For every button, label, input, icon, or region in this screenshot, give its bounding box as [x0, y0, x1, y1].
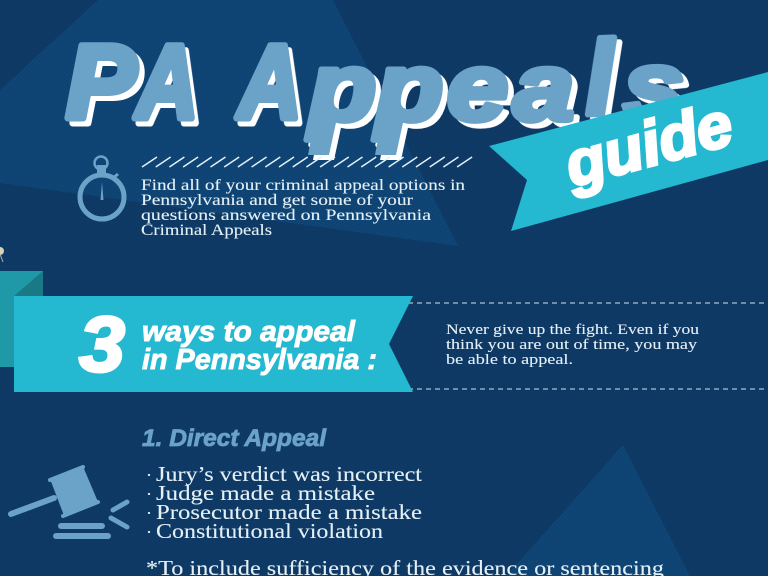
icon: stopwatch: [80, 156, 124, 219]
icon: gavel: [11, 467, 127, 536]
big numeral 3: 3: [79, 300, 125, 388]
side note: be able to appeal.: [446, 352, 573, 368]
intro text: questions answered on Pennsylvania: [141, 207, 431, 224]
banner: 3 ways to appeal: in Pennsylvania :: [142, 344, 377, 376]
title: A: [134, 24, 198, 141]
ribbon: guide: guide: [557, 89, 740, 201]
heading: direct appeal: 1. Direct Appeal: [142, 425, 327, 452]
list: direct appeal reasons: ·: [146, 484, 152, 504]
side note: Never give up the fight. Even if you: [446, 322, 700, 338]
dashed lines: [408, 303, 768, 389]
small figure at edge: [0, 247, 4, 262]
list: direct appeal reasons: Jury’s verdict was incorrect: [156, 462, 422, 486]
list: direct appeal reasons: Judge made a mistake: [156, 481, 375, 505]
list: direct appeal reasons: [146, 462, 664, 576]
title: p: [373, 34, 443, 140]
ribbon: guide: [489, 72, 768, 231]
title: P: [66, 24, 137, 141]
side note: [446, 322, 700, 368]
list: direct appeal reasons: ·: [146, 465, 152, 485]
title: [66, 19, 684, 155]
title: s: [623, 32, 684, 138]
side note: think you are out of time, you may: [446, 337, 698, 353]
intro text: Criminal Appeals: [141, 222, 272, 239]
title: l: [583, 19, 618, 137]
decorative hatch rule: [142, 157, 472, 167]
banner: 3 ways to appeal: ways to appeal: [142, 316, 356, 348]
list: direct appeal reasons: Prosecutor made a mistake: [156, 500, 422, 524]
title: e: [447, 34, 508, 140]
list: direct appeal reasons: Constitutional violation: [156, 519, 383, 543]
title: a: [513, 34, 574, 140]
list: direct appeal reasons: ·: [146, 503, 152, 523]
intro text: [141, 177, 465, 239]
title: p: [306, 34, 376, 140]
banner: 3 ways to appeal: [14, 296, 413, 392]
title: A: [236, 23, 302, 141]
intro text: Pennsylvania and get some of your: [141, 192, 414, 209]
fold box: [0, 271, 43, 367]
list: direct appeal reasons: ·: [146, 522, 152, 542]
intro text: Find all of your criminal appeal options in: [141, 177, 465, 194]
